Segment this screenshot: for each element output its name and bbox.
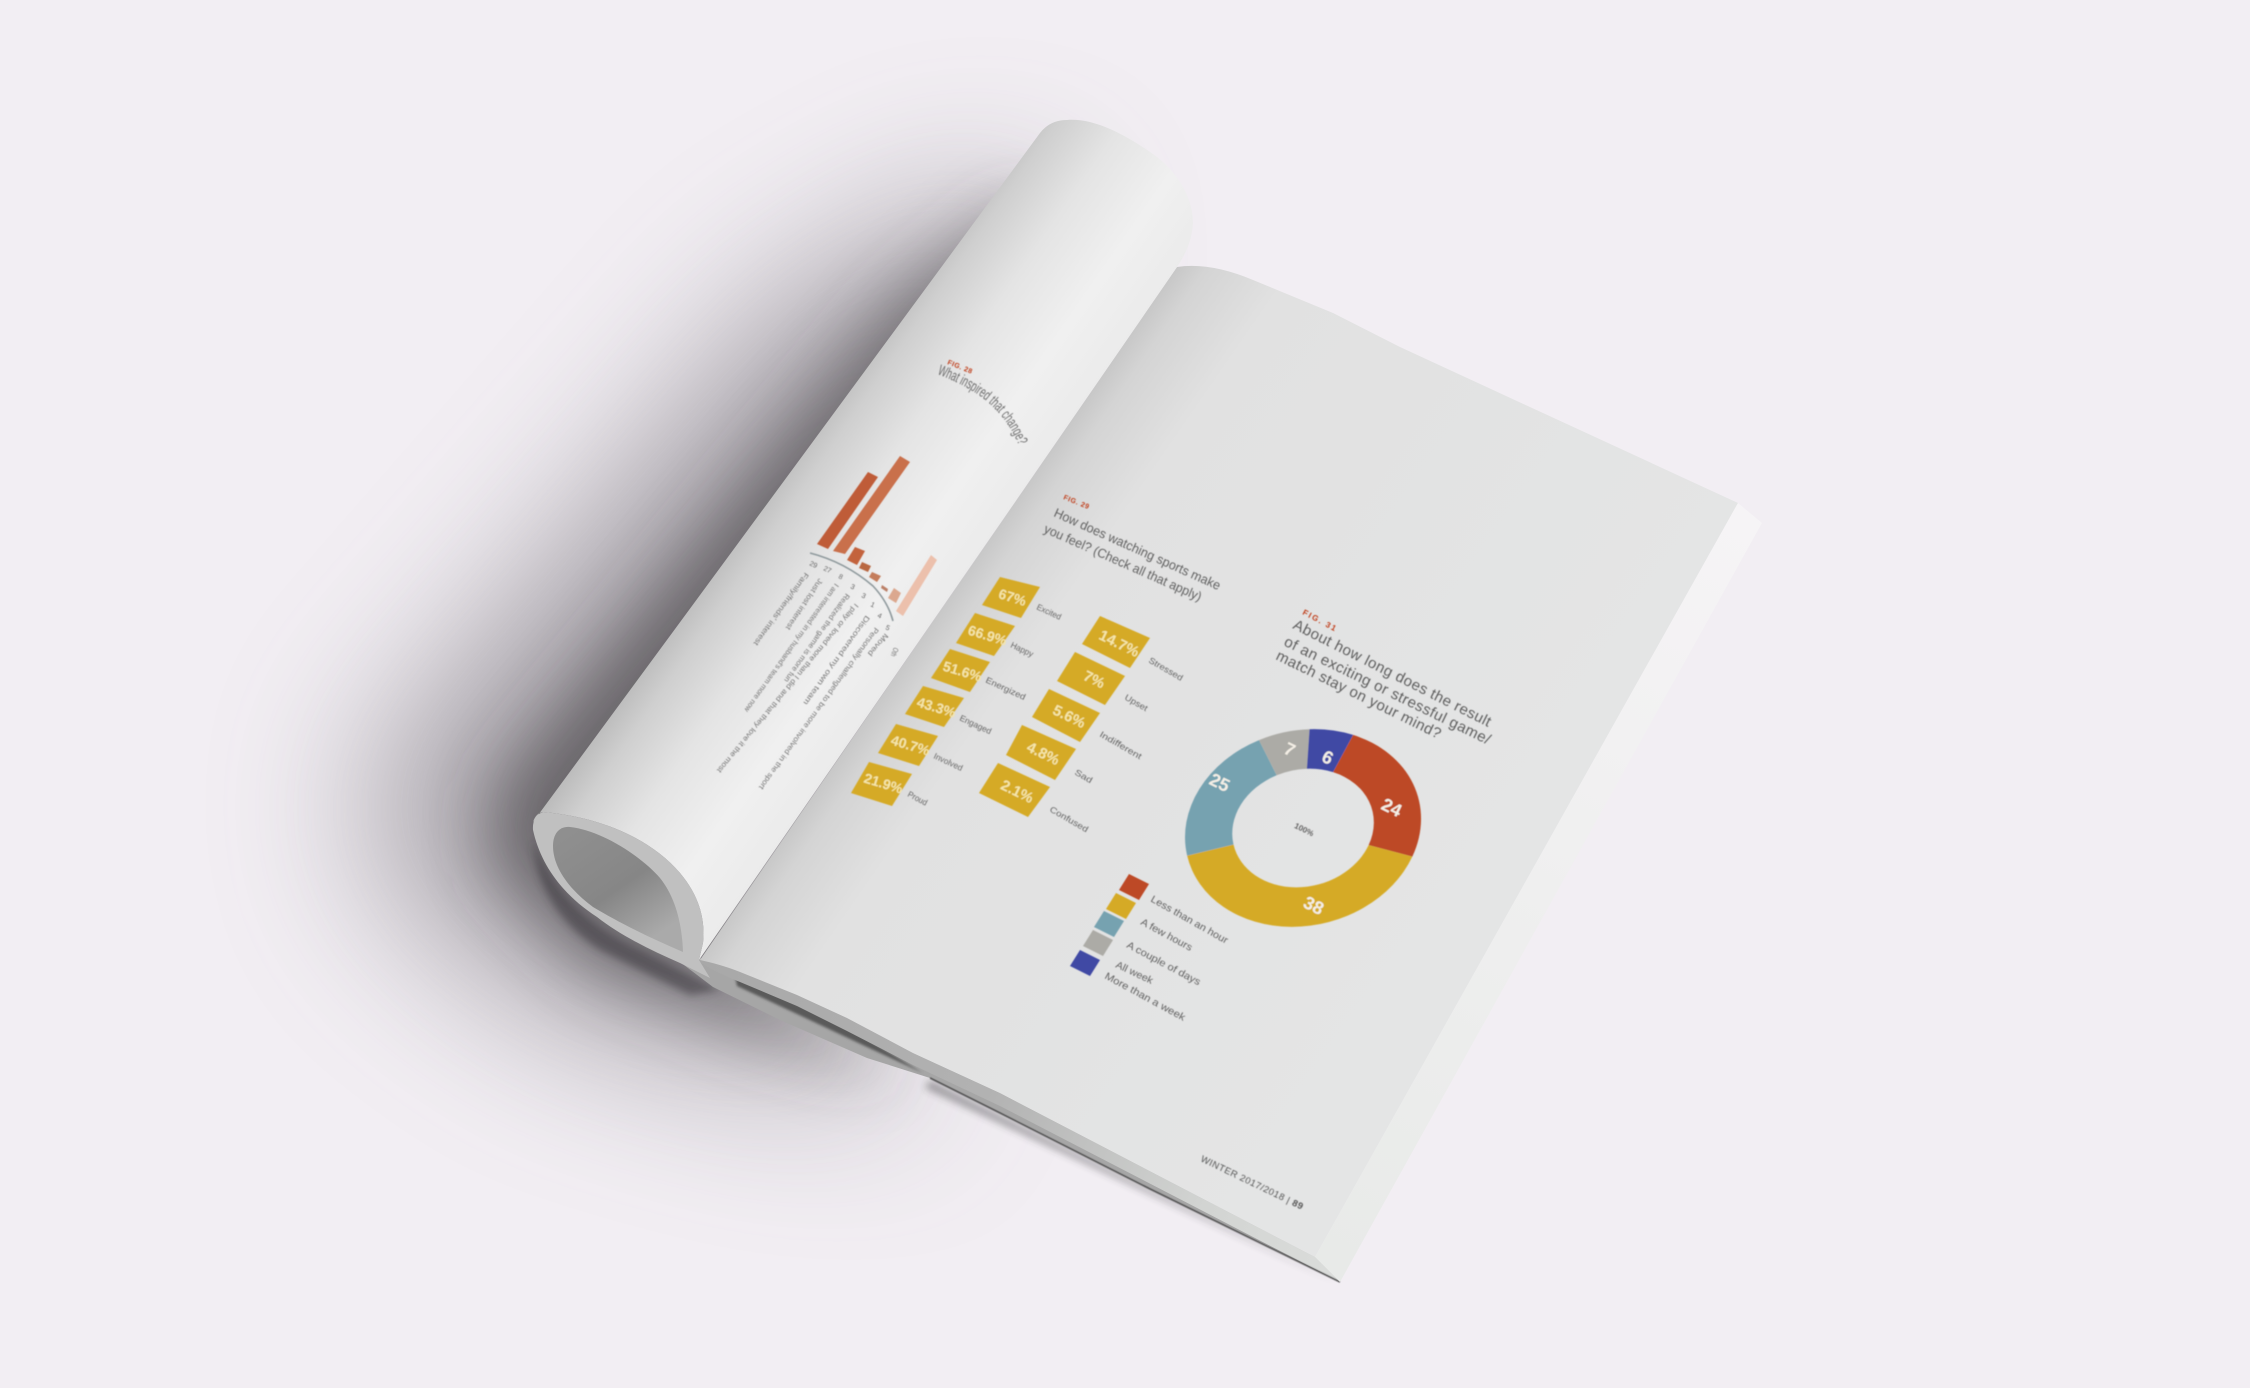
dark gap between page stacks xyxy=(735,976,923,1073)
category labels: Excited xyxy=(1035,602,1063,622)
percent values: column two: 14.7% xyxy=(1096,627,1142,661)
bar row labels: Family/friends' interest xyxy=(751,571,811,648)
percent values: column one: 66.9% xyxy=(966,622,1009,649)
percent values: column two: 7% xyxy=(1081,668,1107,692)
bar values: 8 xyxy=(837,573,844,582)
heading: fig 29 question: How does watching sports make xyxy=(1052,505,1223,593)
bar values: 5 xyxy=(884,624,891,633)
bar chart xyxy=(810,456,937,621)
roll hollow xyxy=(553,827,683,952)
category labels: Involved xyxy=(932,751,965,773)
left page content xyxy=(714,359,1028,792)
heading: fig 31 question: match stay on your mind? xyxy=(1273,647,1444,743)
percent values: column one: 51.6% xyxy=(941,658,984,685)
bar values xyxy=(808,560,891,633)
cover edge strip xyxy=(1315,503,1762,1282)
percent values: column one: 43.3% xyxy=(915,694,958,721)
gold boxes: column two xyxy=(979,616,1150,817)
category labels: Engaged xyxy=(958,713,993,736)
donut values: 38 xyxy=(1300,892,1327,919)
gold boxes: column one xyxy=(851,577,1040,806)
footer: issue and page number: WINTER 2017/2018 | 89 xyxy=(1199,1154,1305,1213)
percent values: column one: 21.9% xyxy=(862,770,905,797)
legend labels: More than a week xyxy=(1103,971,1188,1024)
right page content xyxy=(851,494,1495,1213)
percent values: column two: 2.1% xyxy=(998,777,1036,807)
category labels: Sad xyxy=(1073,767,1095,785)
category labels: Confused xyxy=(1048,804,1091,834)
category labels: Proud xyxy=(906,789,930,808)
bar row labels: Realized the game is more fun xyxy=(782,592,852,684)
donut chart xyxy=(1141,696,1465,960)
category labels: Energized xyxy=(984,675,1028,702)
bar values: 27 xyxy=(822,565,832,575)
figure label: FIG. 29: FIG. 29 xyxy=(1062,494,1091,511)
bar row labels: Oth xyxy=(889,646,900,658)
bar row labels: Just lost interest xyxy=(783,577,825,632)
percent values: column one: 67% xyxy=(997,585,1029,609)
category labels: Stressed xyxy=(1147,655,1185,683)
percent values: column two: 5.6% xyxy=(1050,702,1088,732)
roll front edge xyxy=(533,812,710,978)
heading: fig 29 question: you feel? (Check all that apply) xyxy=(1042,521,1204,604)
dark lower edge line xyxy=(930,1078,1340,1282)
bar values: 3 xyxy=(860,592,867,601)
bar row labels: Discovered my own team xyxy=(802,614,872,707)
donut values xyxy=(1206,738,1405,919)
legend xyxy=(1070,874,1230,1024)
donut values: 24 xyxy=(1378,794,1405,821)
percent values: column two: 4.8% xyxy=(1024,739,1062,769)
lower page block under right page xyxy=(680,958,1340,1282)
heading: curved question: What inspired that change? xyxy=(938,364,1028,444)
category labels: Indifferent xyxy=(1098,729,1144,762)
legend labels: A few hours xyxy=(1139,917,1194,954)
left page rolled xyxy=(533,120,1193,960)
cast shadow of the book xyxy=(360,190,1340,1283)
legend labels: Less than an hour xyxy=(1149,894,1230,947)
legend labels: All week xyxy=(1114,960,1156,987)
donut values: 25 xyxy=(1206,769,1233,796)
figure label: FIG. 31: FIG. 31 xyxy=(1301,608,1339,634)
percent values: column one: 40.7% xyxy=(889,732,932,759)
bar row labels xyxy=(714,571,900,792)
heading: fig 31 question: of an exciting or stressful game/ xyxy=(1281,633,1494,749)
legend labels: A couple of days xyxy=(1125,940,1202,988)
bar values: 3 xyxy=(849,583,856,592)
donut values: 6 xyxy=(1319,746,1337,769)
bar values: 4 xyxy=(876,612,883,621)
bar row labels: I am interested in my husband's team more now xyxy=(742,582,841,714)
percent values: column one xyxy=(862,585,1029,797)
upper page stack edge xyxy=(700,960,1340,1282)
category labels: Upset xyxy=(1123,692,1150,714)
bar row labels: I play or loved more than I did and that they love it the most xyxy=(714,602,860,775)
category labels xyxy=(906,602,1185,834)
percent values: column two xyxy=(998,627,1142,807)
right page xyxy=(700,266,1738,1257)
donut centre total: 100% xyxy=(1293,821,1315,838)
category labels: Happy xyxy=(1009,640,1036,659)
bar values: 1 xyxy=(869,601,876,610)
heading: fig 31 question: About how long does the result xyxy=(1290,616,1495,731)
bar row labels: Moved xyxy=(866,632,890,658)
bar values: 29 xyxy=(808,560,818,570)
bar row labels: Personally challenged to be more involved in the sport xyxy=(756,626,881,792)
legend labels xyxy=(1103,894,1230,1024)
figure label: FIG. 28: FIG. 28 xyxy=(946,359,974,376)
donut values: 7 xyxy=(1281,738,1299,761)
